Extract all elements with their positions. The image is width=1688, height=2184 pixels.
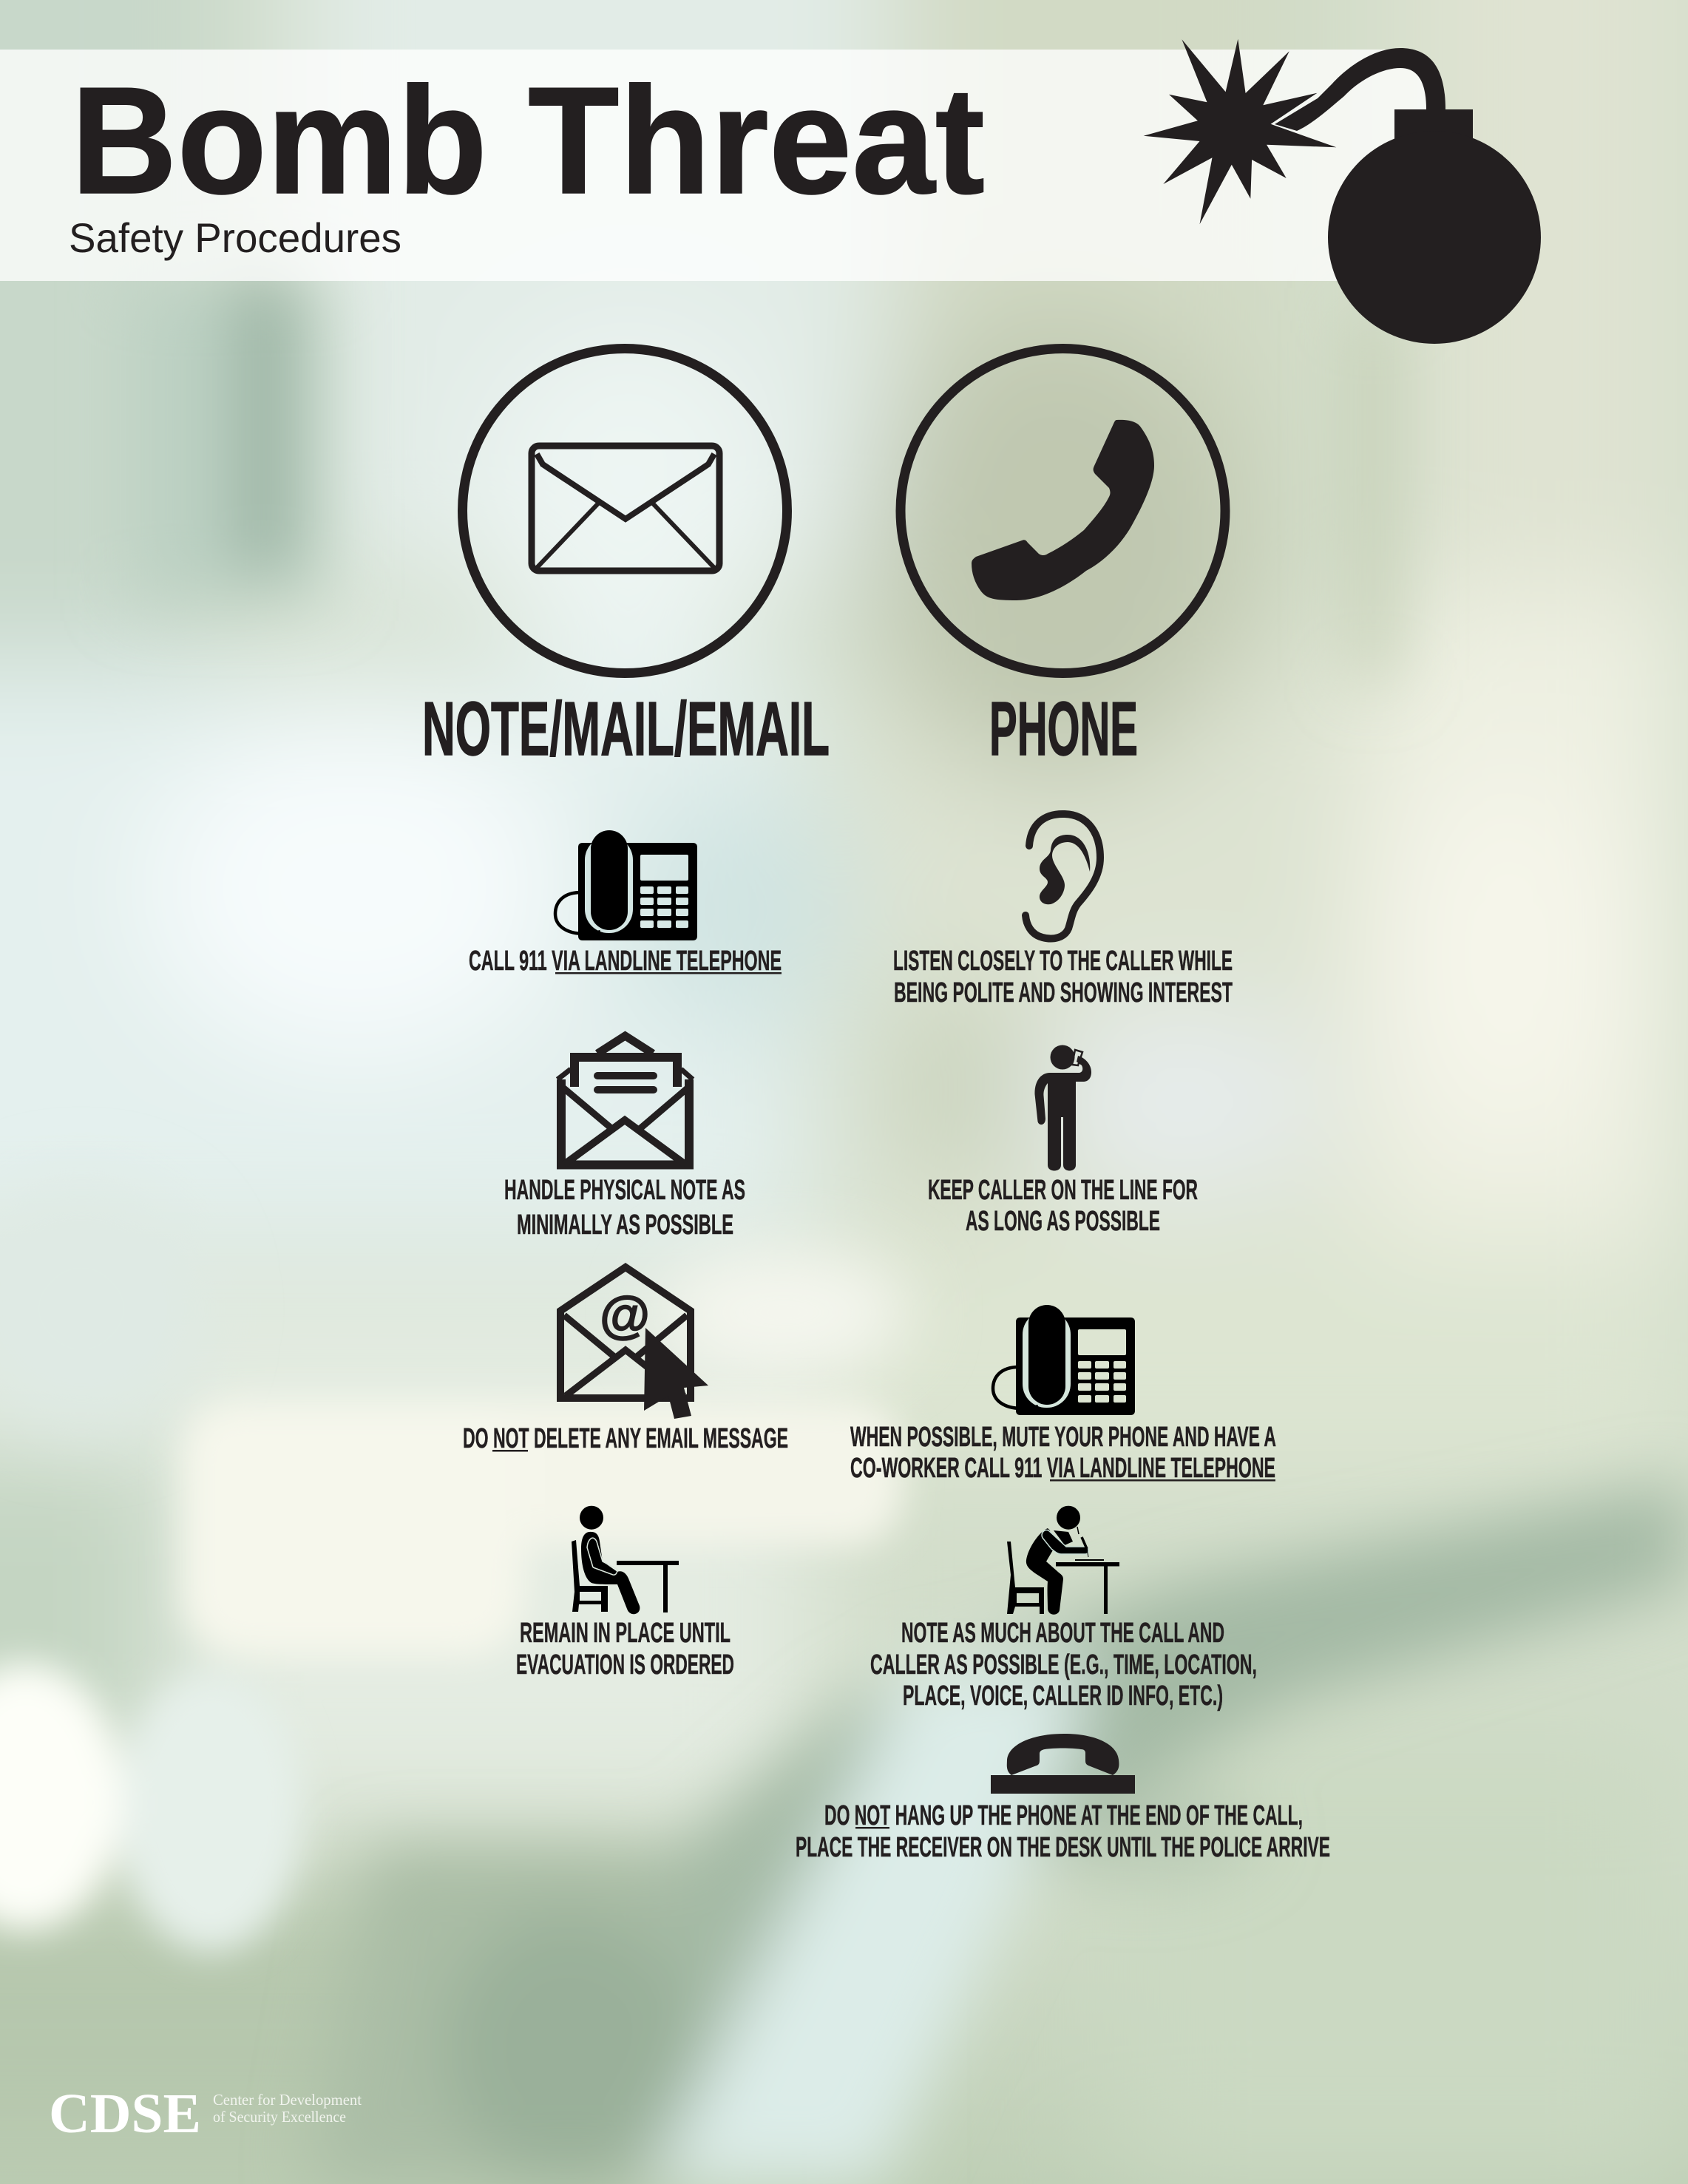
icon: envelope in circle xyxy=(463,349,787,673)
title: Bomb Threat: Threat xyxy=(528,55,985,225)
label: keep caller on line: AS LONG AS POSSIBLE xyxy=(966,1206,1160,1237)
icon: email envelope with cursor xyxy=(560,1267,708,1419)
label: do not hang up: DO NOT HANG UP THE PHONE AT THE END OF THE CALL, xyxy=(824,1800,1303,1831)
logo: CDSE xyxy=(49,2083,362,2145)
logo: CDSE: CDSE xyxy=(49,2083,201,2145)
icon: telephone handset in circle xyxy=(901,349,1225,673)
label: remain in place: EVACUATION IS ORDERED xyxy=(516,1649,734,1681)
label: listen closely xyxy=(893,946,1233,1008)
label: do not hang up: PLACE THE RECEIVER ON THE DESK UNTIL THE POLICE ARRIVE xyxy=(796,1832,1330,1863)
label: note as much: NOTE AS MUCH ABOUT THE CALL AND xyxy=(901,1618,1224,1649)
icon: open envelope with note xyxy=(557,1036,693,1165)
label: call 911: CALL 911 VIA LANDLINE TELEPHONE xyxy=(469,946,782,977)
label: note as much: PLACE, VOICE, CALLER ID INFO, ETC.) xyxy=(903,1681,1223,1712)
title banner xyxy=(0,50,1434,281)
at sign: @ xyxy=(600,1286,650,1343)
icon: person writing at desk xyxy=(1007,1506,1119,1615)
heading: phone: PHONE xyxy=(989,686,1138,771)
icon: telephone receiver on desk xyxy=(991,1734,1135,1794)
icon: seated person at desk xyxy=(572,1506,679,1614)
title: Bomb Threat: Bomb xyxy=(71,55,487,225)
label: do not hang up xyxy=(796,1800,1330,1863)
label: listen closely: LISTEN CLOSELY TO THE CALLER WHILE xyxy=(893,946,1233,977)
icon: desk telephone xyxy=(555,830,697,940)
subtitle: Safety Procedures: Safety Procedures xyxy=(69,214,401,261)
logo: CDSE: of Security Excellence xyxy=(213,2108,346,2126)
icon: person on phone xyxy=(1034,1045,1091,1171)
icon: ear xyxy=(1026,814,1100,939)
label: remain in place xyxy=(516,1618,734,1681)
title: Bomb Threat xyxy=(71,55,985,225)
label: mute your phone xyxy=(850,1422,1276,1484)
label: note as much: CALLER AS POSSIBLE (E.G., TIME, LOCATION, xyxy=(870,1649,1257,1681)
label: keep caller on line: KEEP CALLER ON THE LINE FOR xyxy=(928,1175,1198,1206)
label: mute your phone: CO-WORKER CALL 911 VIA LANDLINE TELEPHONE xyxy=(850,1453,1275,1484)
icon: desk telephone xyxy=(993,1305,1135,1415)
label: handle physical note xyxy=(504,1175,745,1241)
label: remain in place: REMAIN IN PLACE UNTIL xyxy=(520,1618,731,1649)
label: handle physical note: MINIMALLY AS POSSIBLE xyxy=(517,1210,733,1241)
label: handle physical note: HANDLE PHYSICAL NOTE AS xyxy=(504,1175,745,1206)
logo: CDSE: Center for Development xyxy=(213,2091,362,2109)
label: do not delete: DO NOT DELETE ANY EMAIL MESSAGE xyxy=(463,1423,788,1454)
label: keep caller on line xyxy=(928,1175,1198,1237)
heading: note/mail/email: NOTE/MAIL/EMAIL xyxy=(422,686,830,771)
label: listen closely: BEING POLITE AND SHOWING INTEREST xyxy=(894,977,1233,1008)
label: mute your phone: WHEN POSSIBLE, MUTE YOUR PHONE AND HAVE A xyxy=(850,1422,1276,1453)
icon: bomb with lit fuse xyxy=(1144,39,1541,344)
label: note as much xyxy=(870,1618,1257,1712)
